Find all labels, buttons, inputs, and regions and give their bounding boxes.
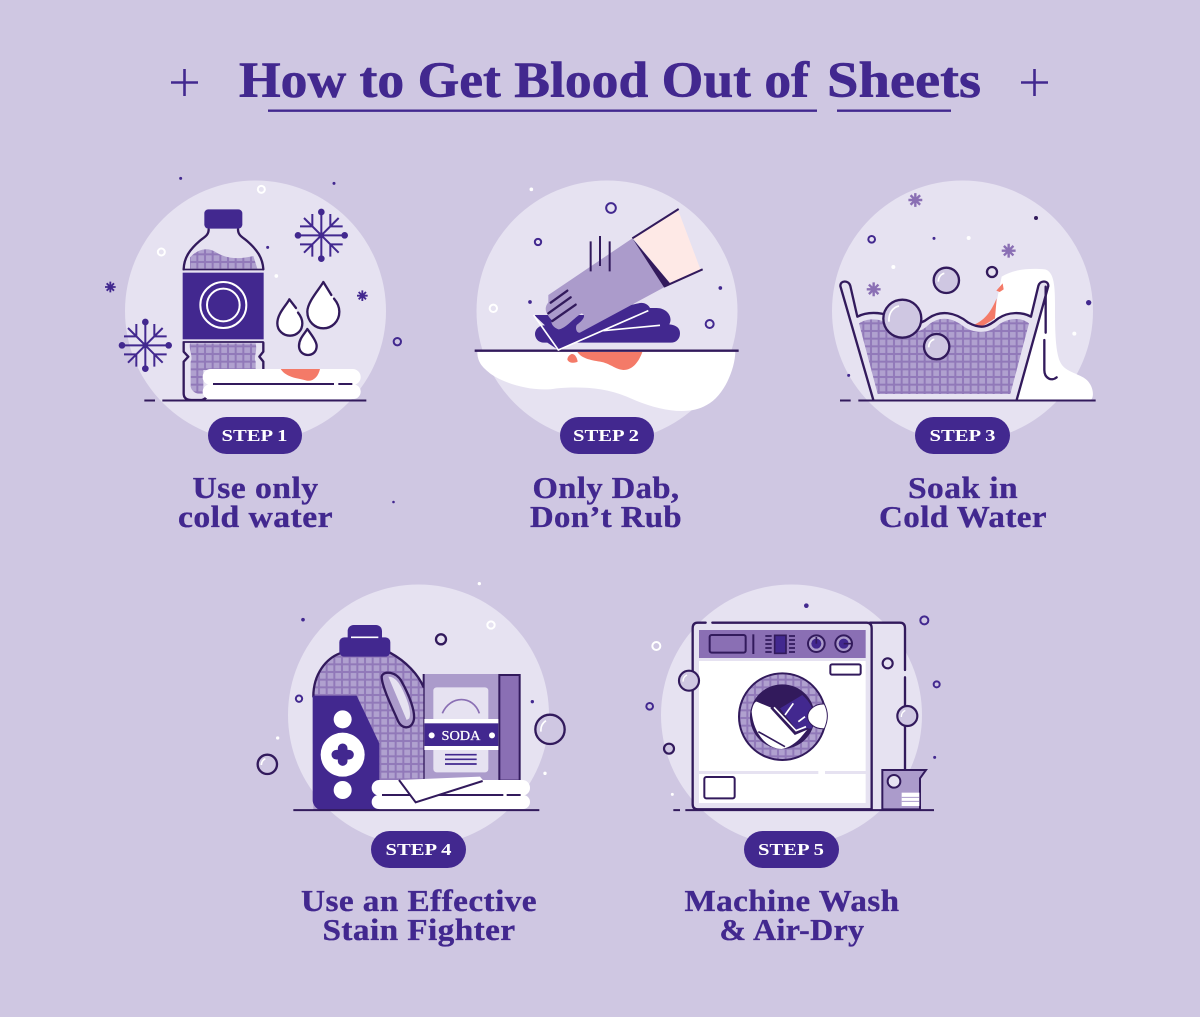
blood stain	[970, 283, 1004, 327]
ground line	[673, 807, 934, 813]
circle backdrop	[832, 180, 1093, 442]
soap bubbles	[664, 658, 917, 754]
icon: snowflake top	[296, 210, 347, 261]
blood stain	[567, 352, 642, 370]
step badge	[371, 831, 466, 868]
heading text: How to Get Blood Out of	[239, 53, 810, 109]
panel: step 4	[258, 582, 565, 947]
step badge	[208, 417, 302, 454]
illustration: soaking basin	[840, 193, 1096, 400]
soap bubbles	[883, 267, 997, 359]
ground line	[144, 397, 366, 403]
plus right	[1021, 69, 1048, 96]
icon: snowflake bottom	[120, 320, 171, 371]
step label	[301, 883, 537, 947]
step badge	[915, 417, 1010, 454]
icon: folded towel with stain	[203, 369, 361, 399]
icon: water drops	[277, 282, 339, 355]
step badge: STEP 2	[573, 426, 639, 445]
decorations	[105, 177, 401, 345]
SODA label: SODA	[442, 729, 481, 744]
heading text end: Sheets	[827, 53, 981, 109]
step label: Cold Water	[879, 499, 1047, 534]
motion lines	[591, 236, 610, 271]
illustration: detergent and soda	[258, 582, 565, 810]
decorations	[490, 187, 722, 328]
control panel	[699, 630, 866, 658]
step label: & Air-Dry	[720, 912, 865, 947]
panel: step 1	[105, 177, 401, 534]
step label: Use an Effective	[301, 883, 537, 918]
circle backdrop	[125, 180, 386, 442]
step badge: STEP 3	[930, 426, 996, 445]
plus left	[171, 69, 198, 96]
step badge	[560, 417, 654, 454]
step label: Stain Fighter	[322, 912, 516, 947]
measuring cup	[882, 770, 926, 809]
basin	[840, 281, 1057, 400]
detergent bottle	[313, 625, 423, 810]
step label	[178, 470, 333, 534]
decorations	[276, 582, 547, 775]
panel: step 5	[646, 584, 940, 947]
white cloth	[992, 269, 1093, 400]
circle backdrop	[288, 584, 549, 846]
stray dot	[392, 501, 395, 503]
step badge: STEP 4	[386, 840, 452, 859]
ground line	[293, 807, 539, 813]
machine body	[693, 623, 905, 809]
cloth	[534, 303, 680, 350]
panel: step 3	[832, 180, 1096, 534]
panel: step 2	[475, 180, 739, 534]
step label: cold water	[178, 499, 333, 534]
soda box	[424, 674, 520, 781]
soap bubbles	[258, 634, 565, 774]
towel	[372, 777, 530, 809]
step badge: STEP 1	[222, 426, 288, 445]
glove	[546, 209, 703, 333]
step label	[879, 470, 1047, 534]
step label	[684, 883, 900, 947]
illustration: water bottle, drops and towel	[105, 177, 401, 400]
ground line	[840, 397, 1096, 403]
ground line	[475, 347, 739, 354]
underline	[268, 109, 951, 112]
step label: Use only	[192, 470, 319, 505]
illustration: gloved hand dabbing sheet	[475, 187, 739, 411]
step label	[530, 470, 682, 534]
circle backdrop	[476, 180, 738, 442]
title	[171, 53, 1048, 111]
step badge: STEP 5	[758, 840, 824, 859]
illustration: washing machine	[646, 603, 940, 810]
icon: bottle	[183, 209, 264, 400]
step label: Don’t Rub	[530, 499, 682, 534]
drum with laundry	[739, 673, 827, 760]
step label: Only Dab,	[532, 470, 680, 505]
white sheet	[477, 352, 735, 411]
decorations	[847, 193, 1091, 377]
circle backdrop	[661, 584, 922, 846]
step badge	[744, 831, 839, 868]
step label: Soak in	[908, 470, 1018, 505]
step label: Machine Wash	[684, 883, 900, 918]
decorations	[646, 603, 940, 796]
